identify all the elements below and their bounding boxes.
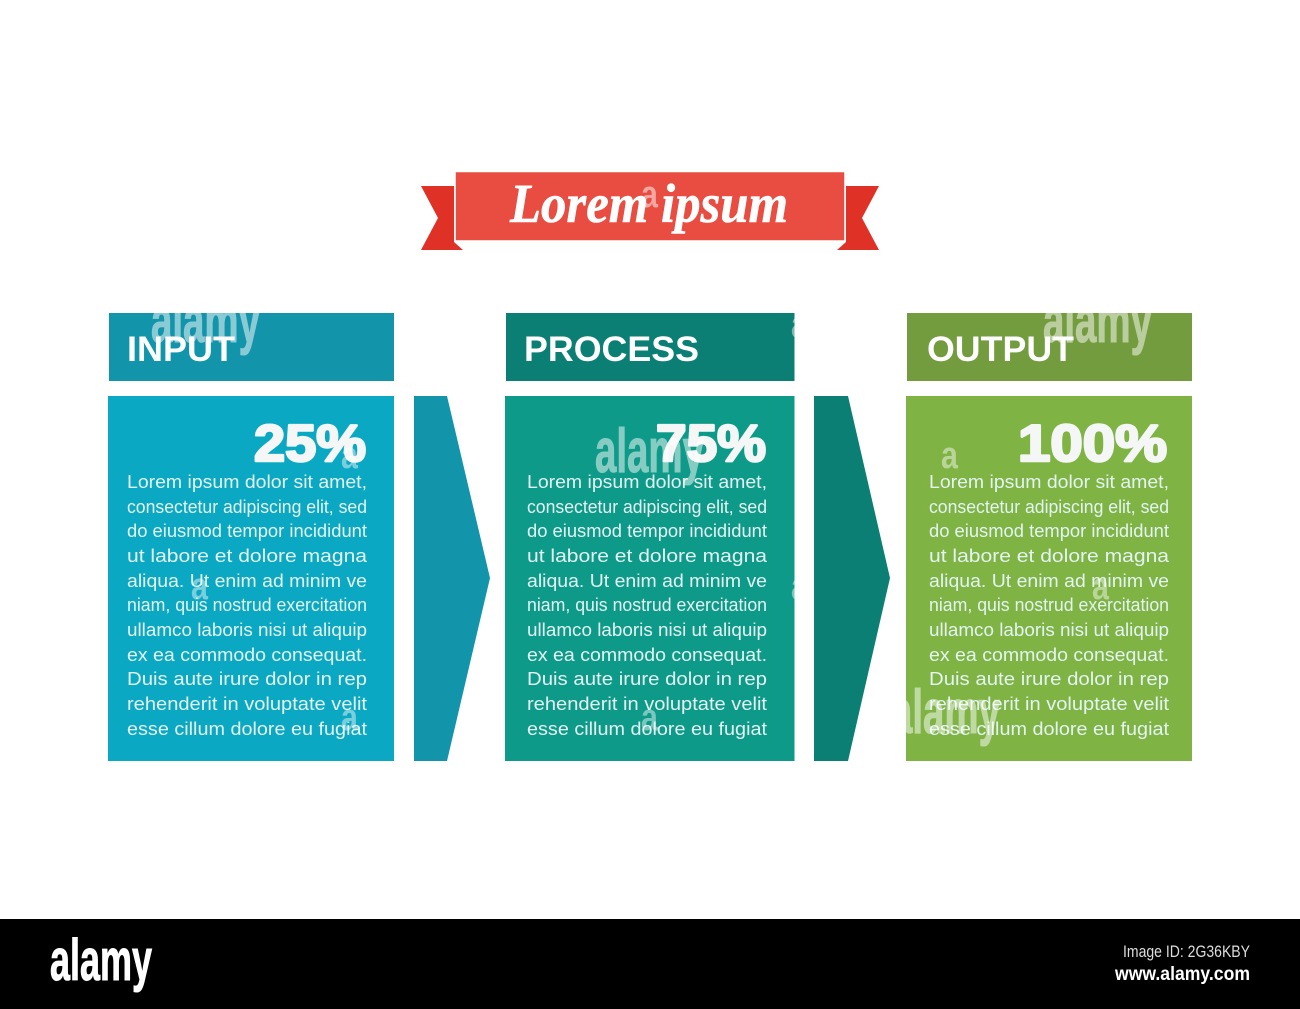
output text block: Lorem ipsum dolor sit amet,: [929, 472, 1169, 492]
process text block: do eiusmod tempor incididunt: [527, 521, 767, 541]
website: www.alamy.com: [1114, 964, 1250, 985]
process heading: PROCESS: [524, 330, 699, 369]
arrow: input to process: [414, 396, 490, 761]
output small watermarks: a: [941, 435, 959, 477]
output heading: OUTPUT: [927, 330, 1074, 369]
process text block: consectetur adipiscing elit, sed: [527, 497, 767, 517]
output small watermarks: a: [1092, 566, 1110, 608]
input text block: ex ea commodo consequat.: [127, 645, 367, 665]
panel: output: [891, 287, 1192, 761]
output text block: aliqua. Ut enim ad minim ve: [929, 571, 1169, 591]
ribbon band: [455, 172, 845, 241]
input header bar: [109, 313, 394, 381]
ribbon left tail: [421, 186, 463, 250]
process text block: ex ea commodo consequat.: [527, 645, 767, 665]
process small watermarks: a: [641, 697, 659, 739]
input heading: INPUT: [127, 330, 235, 369]
process text block: niam, quis nostrud exercitation: [527, 595, 767, 615]
process header bar: [506, 313, 794, 381]
footer bar: [0, 919, 1300, 1009]
arrow: process to output: [814, 396, 890, 761]
image id: Image ID: 2G36KBY: [1123, 942, 1250, 961]
output text block: consectetur adipiscing elit, sed: [929, 497, 1169, 517]
input small watermarks: a: [341, 435, 359, 477]
input small watermarks: a: [341, 697, 359, 739]
process text block: ut labore et dolore magna: [527, 546, 768, 566]
input text block: ut labore et dolore magna: [127, 546, 368, 566]
input text block: Duis aute irure dolor in rep: [127, 669, 367, 689]
output text block: ullamco laboris nisi ut aliquip: [929, 620, 1169, 640]
process small watermarks: [641, 304, 809, 739]
input percentage: 25%: [254, 415, 366, 473]
input text block: niam, quis nostrud exercitation: [127, 595, 367, 615]
input text block: consectetur adipiscing elit, sed: [127, 497, 367, 517]
output text block: ex ea commodo consequat.: [929, 645, 1169, 665]
input watermark: alamy: [151, 287, 260, 356]
output text block: niam, quis nostrud exercitation: [929, 595, 1169, 615]
input small watermarks: a: [191, 566, 209, 608]
output watermark: alamy: [1043, 287, 1152, 356]
process text block: ullamco laboris nisi ut aliquip: [527, 620, 767, 640]
process body box: [505, 396, 794, 761]
process text block: esse cillum dolore eu fugiat: [527, 719, 767, 739]
output text block: Duis aute irure dolor in rep: [929, 669, 1169, 689]
process text block: Duis aute irure dolor in rep: [527, 669, 767, 689]
ribbon right tail: [837, 186, 879, 250]
input small watermarks: [191, 435, 359, 739]
output body box: [906, 396, 1192, 761]
process text block: aliqua. Ut enim ad minim ve: [527, 571, 767, 591]
output small watermarks: [941, 435, 1110, 608]
input text block: esse cillum dolore eu fugiat: [127, 719, 367, 739]
input text block: Lorem ipsum dolor sit amet,: [127, 472, 367, 492]
process text block: Lorem ipsum dolor sit amet,: [527, 472, 767, 492]
process text block: rehenderit in voluptate velit: [527, 694, 767, 714]
output text block: esse cillum dolore eu fugiat: [929, 719, 1169, 739]
footer logo: alamy: [50, 928, 152, 993]
process small watermarks: a: [791, 566, 809, 608]
output header bar: [907, 313, 1192, 381]
panel: process: [505, 304, 809, 761]
process text block: [527, 472, 768, 739]
output text block: do eiusmod tempor incididunt: [929, 521, 1169, 541]
input text block: ullamco laboris nisi ut aliquip: [127, 620, 367, 640]
input text block: do eiusmod tempor incididunt: [127, 521, 367, 541]
title ribbon: [421, 172, 879, 250]
process small watermarks: a: [791, 304, 809, 346]
input text block: [127, 472, 368, 739]
panel: input: [108, 287, 394, 761]
input text block: rehenderit in voluptate velit: [127, 694, 367, 714]
input text block: aliqua. Ut enim ad minim ve: [127, 571, 367, 591]
process percentage: 75%: [656, 415, 766, 473]
input body box: [108, 396, 394, 761]
process watermark: alamy: [595, 417, 704, 486]
output text block: rehenderit in voluptate velit: [929, 694, 1169, 714]
output text block: [929, 472, 1170, 739]
output percentage: 100%: [1018, 415, 1167, 473]
title text: Lorem ipsum: [509, 173, 788, 234]
output watermark lower: alamy: [891, 678, 1000, 747]
title watermark: a: [641, 174, 659, 216]
output text block: ut labore et dolore magna: [929, 546, 1170, 566]
